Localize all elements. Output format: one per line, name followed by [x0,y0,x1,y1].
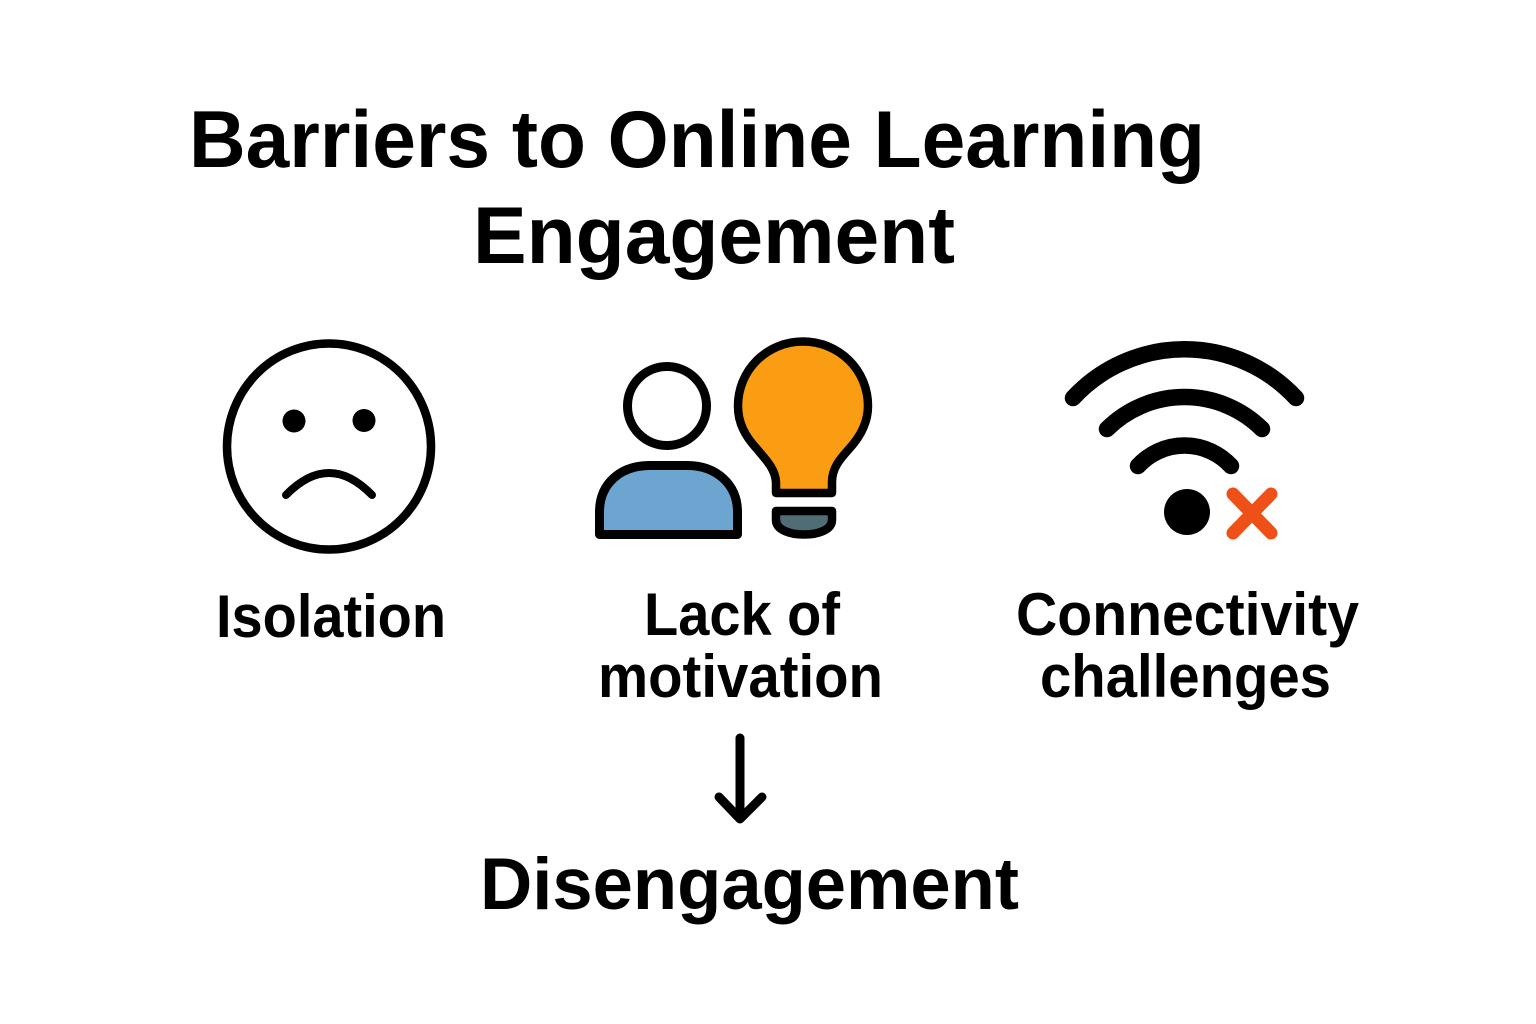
label: isolation: Isolation [216,583,446,650]
red cross [1233,494,1271,533]
icon: sad face [227,344,431,550]
icon: wifi with error mark [1073,349,1296,535]
label: connectivity challenges: challenges [1040,643,1331,710]
outcome: disengagement: Disengagement [480,844,1019,925]
label: lack of motivation: motivation [598,643,883,710]
icon: person and lightbulb [600,342,868,534]
title: Engagement [473,191,955,281]
lightbulb glass [738,342,868,493]
person head [628,366,706,446]
label: connectivity challenges: Connectivity [1016,581,1360,648]
label: lack of motivation [598,581,883,710]
label: connectivity challenges [1016,581,1360,710]
title: Barriers to Online Learning [189,95,1205,185]
arrow: down [719,738,762,819]
title [189,95,1205,281]
label: lack of motivation: Lack of [644,581,841,648]
person body [600,466,738,534]
lightbulb base [776,511,832,534]
